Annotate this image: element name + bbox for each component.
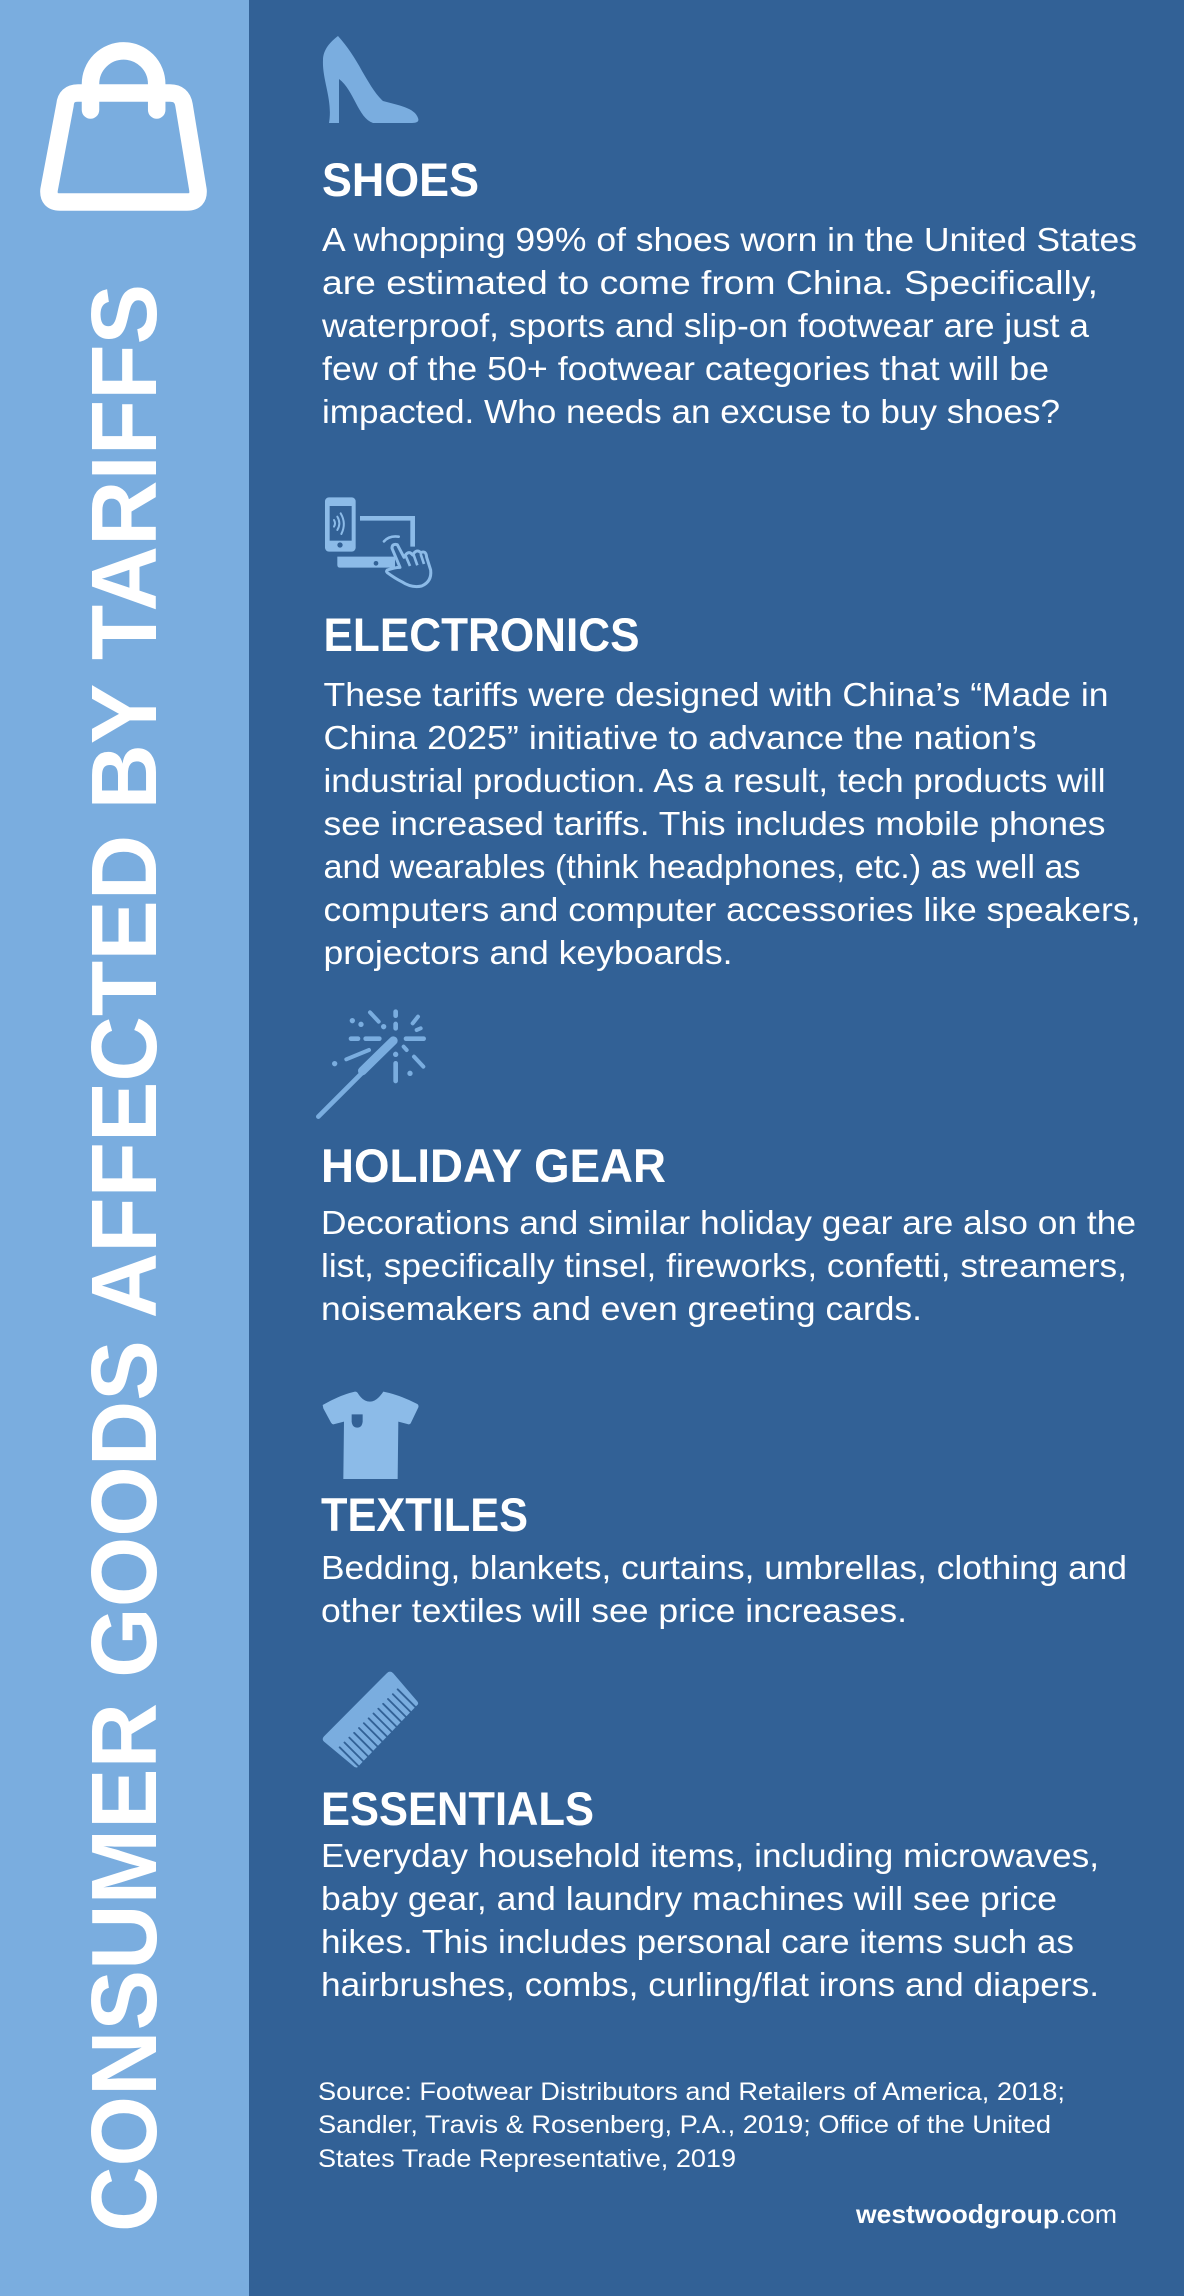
heading: essentials: ESSENTIALS	[321, 1782, 594, 1835]
section: shoes	[321, 36, 1137, 430]
text: shoes body: few of the 50+ footwear categories that will be	[322, 350, 1049, 387]
heading: electronics: ELECTRONICS	[324, 608, 640, 661]
source note: States Trade Representative, 2019	[318, 2145, 736, 2173]
icon: phone, tablet and hand	[325, 497, 431, 587]
text: textiles body: other textiles will see price increases.	[321, 1592, 907, 1629]
source note: Source: Footwear Distributors and Retailers of America, 2018;	[318, 2078, 1065, 2106]
text: essentials body: hikes. This includes personal care items such as	[321, 1923, 1074, 1960]
website url: westwoodgroup	[855, 2199, 1059, 2229]
text: shoes body: are estimated to come from China. Specifically,	[322, 264, 1098, 301]
text: shoes body: A whopping 99% of shoes worn in the United States	[322, 221, 1137, 258]
text: essentials body	[321, 1837, 1099, 2003]
text: electronics body: These tariffs were designed with China’s “Made in	[324, 676, 1108, 713]
text: holiday gear body: list, specifically tinsel, fireworks, confetti, streamers,	[321, 1247, 1127, 1284]
text: holiday gear body: noisemakers and even greeting cards.	[321, 1290, 922, 1327]
sidebar panel	[0, 0, 249, 2296]
vertical title: CONSUMER GOODS AFFECTED BY TARIFFS	[72, 284, 176, 2232]
text: essentials body: baby gear, and laundry machines will see price	[321, 1880, 1057, 1917]
text: electronics body	[324, 676, 1140, 971]
heading: textiles: TEXTILES	[321, 1488, 528, 1541]
icon: shopping bag	[49, 51, 198, 202]
section: holiday gear	[318, 1012, 1136, 1327]
text: electronics body: computers and computer accessories like speakers,	[324, 891, 1140, 928]
section: electronics	[324, 497, 1140, 971]
text: holiday gear body: Decorations and similar holiday gear are also on the	[321, 1204, 1136, 1241]
icon: high heel shoe	[323, 36, 418, 123]
text: electronics body: industrial production. As a result, tech products will	[324, 762, 1106, 799]
source note	[318, 2078, 1065, 2173]
text: essentials body: Everyday household items, including microwaves,	[321, 1837, 1099, 1874]
text: electronics body: see increased tariffs. This includes mobile phones	[324, 805, 1106, 842]
text: shoes body: waterproof, sports and slip-on footwear are just a	[321, 307, 1090, 344]
text: textiles body	[321, 1549, 1127, 1629]
text: shoes body: impacted. Who needs an excuse to buy shoes?	[322, 393, 1060, 430]
heading: holiday gear: HOLIDAY GEAR	[321, 1139, 666, 1192]
icon: t-shirt	[323, 1392, 419, 1479]
heading: shoes: SHOES	[322, 153, 479, 206]
text: holiday gear body	[321, 1204, 1136, 1327]
section: textiles	[321, 1392, 1127, 1629]
icon: sparkler	[318, 1012, 424, 1117]
icon: comb	[323, 1672, 418, 1767]
text: electronics body: China 2025” initiative to advance the nation’s	[324, 719, 1036, 756]
text: textiles body: Bedding, blankets, curtains, umbrellas, clothing and	[321, 1549, 1127, 1586]
text: essentials body: hairbrushes, combs, curling/flat irons and diapers.	[321, 1966, 1099, 2003]
section: essentials	[321, 1672, 1099, 2003]
text: electronics body: and wearables (think headphones, etc.) as well as	[324, 848, 1080, 885]
text: electronics body: projectors and keyboards.	[324, 934, 732, 971]
text: shoes body	[321, 221, 1137, 430]
website url: .com	[1059, 2199, 1117, 2229]
source note: Sandler, Travis & Rosenberg, P.A., 2019; Office of the United	[318, 2111, 1051, 2139]
